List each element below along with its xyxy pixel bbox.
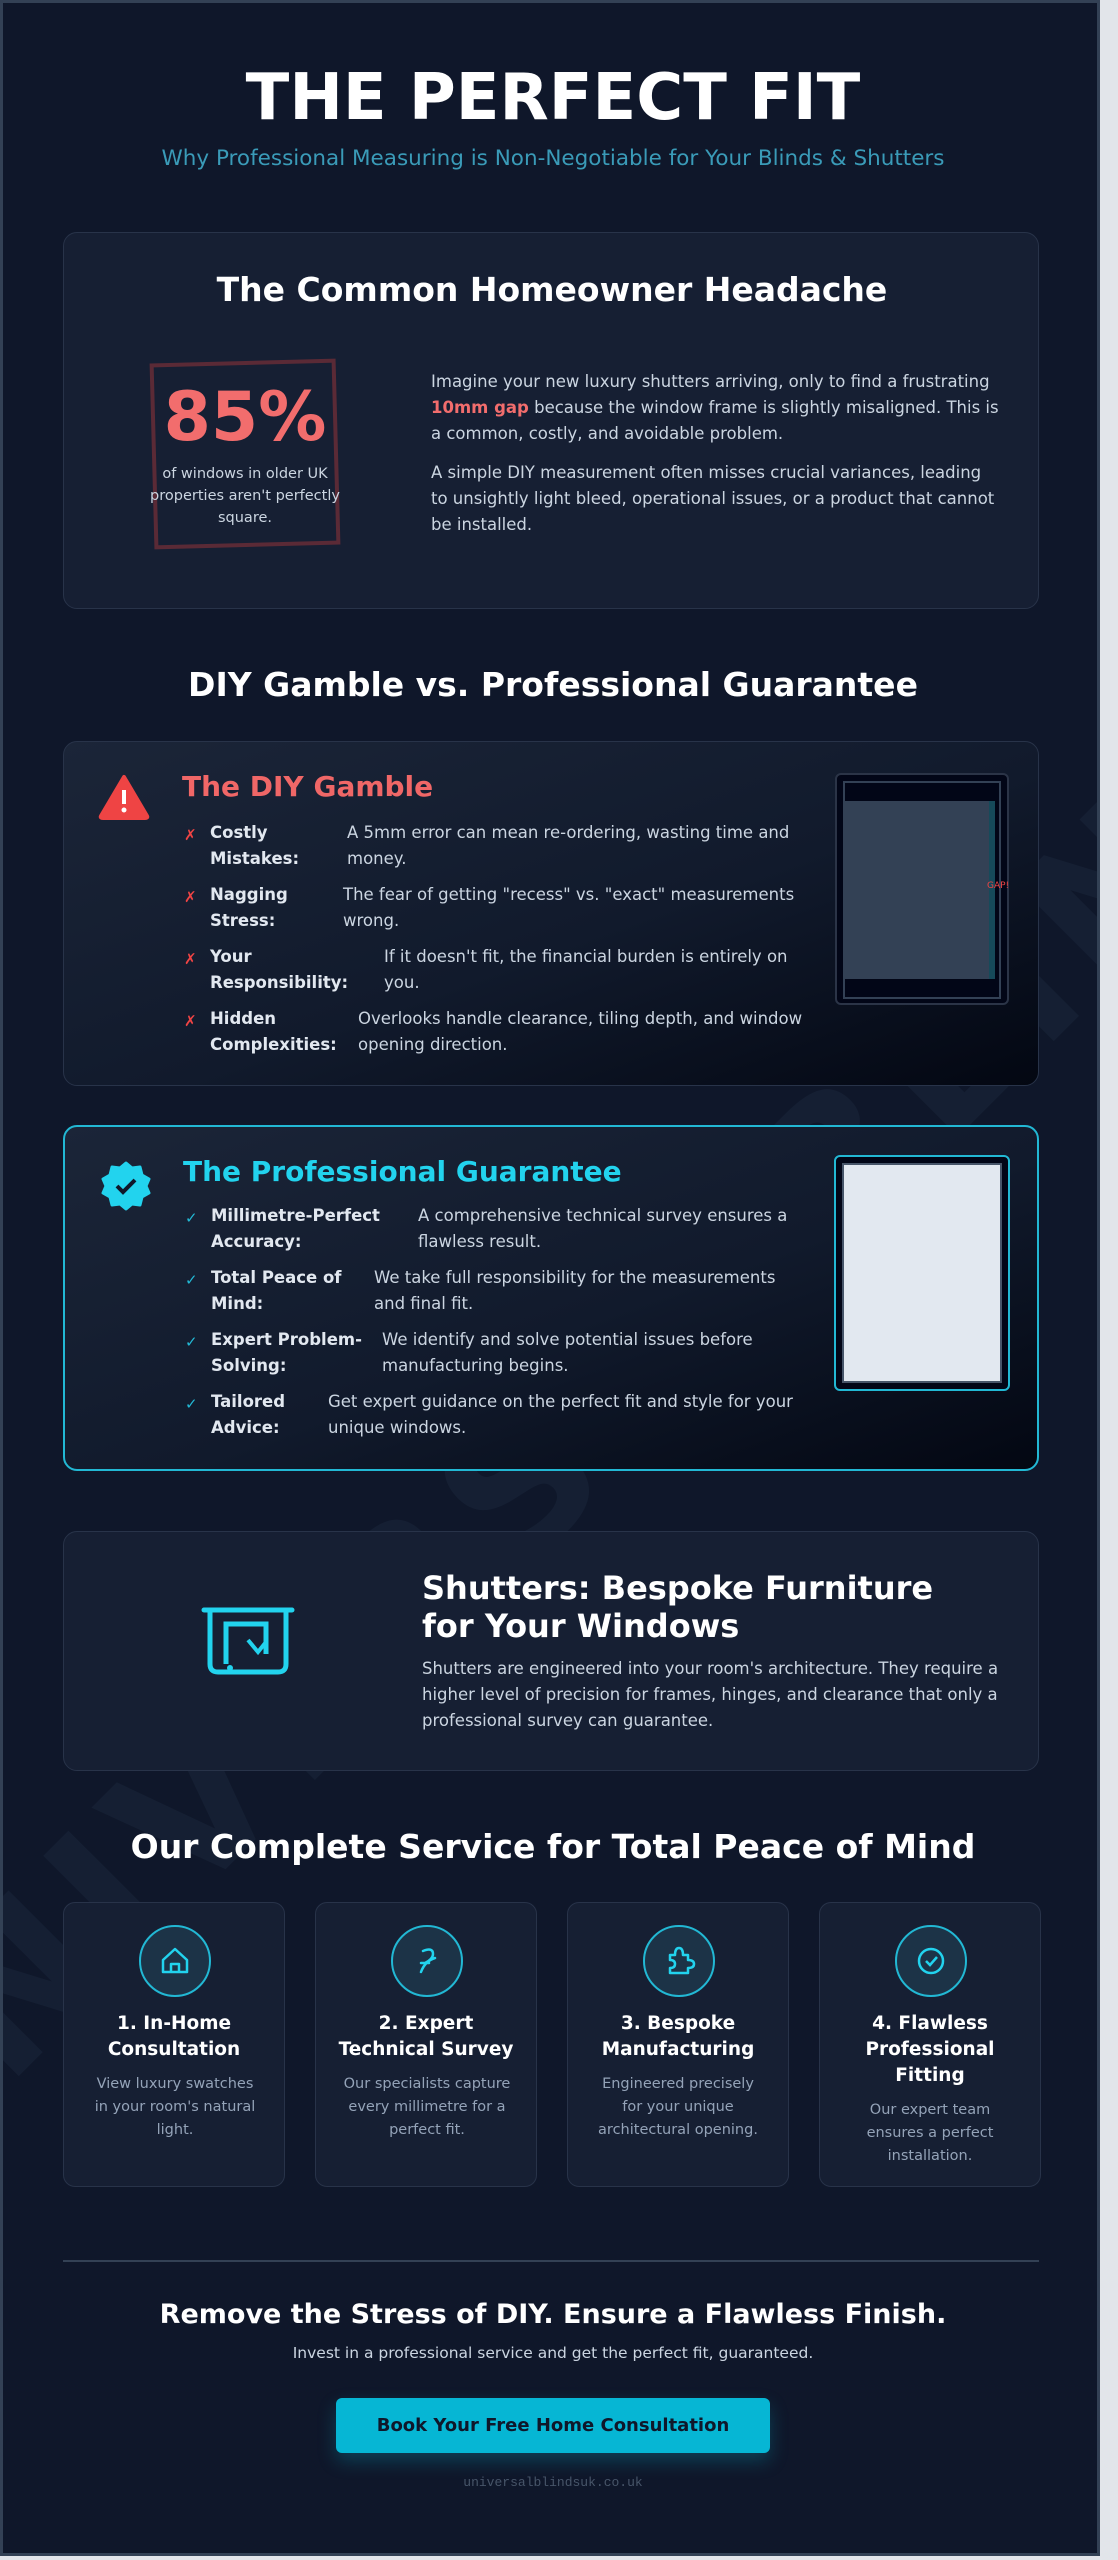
card: manufacturing xyxy=(567,1902,789,2187)
icon: check circle xyxy=(895,1925,967,1997)
panel: professional guarantee: ✓ xyxy=(185,1333,198,1351)
panel: professional guarantee: Tailored Advice: xyxy=(211,1392,285,1437)
panel: common homeowner headache: of windows in older UK properties aren't perfectly square. xyxy=(150,466,340,526)
text block xyxy=(431,372,999,534)
icon: puzzle xyxy=(643,1925,715,1997)
panel: DIY gamble: ✗ xyxy=(184,1012,197,1030)
card: consultation xyxy=(63,1902,285,2187)
list: ✗ xyxy=(184,826,197,844)
heading: The Common Homeowner Headache xyxy=(217,270,887,309)
card: fitting: Professional xyxy=(865,2039,995,2060)
panel: common homeowner headache xyxy=(63,232,1039,609)
card: fitting: Fitting xyxy=(895,2065,965,2086)
card: consultation: Consultation xyxy=(108,2039,240,2060)
footer url: universalblindsuk.co.uk xyxy=(463,2475,643,2490)
card: survey xyxy=(315,1902,537,2187)
list: Millimetre-Perfect Accuracy: xyxy=(211,1206,380,1251)
title: THE PERFECT FIT xyxy=(246,61,860,135)
panel: common homeowner headache: 85% xyxy=(164,378,326,457)
panel: DIY gamble xyxy=(63,741,1039,1086)
card: survey: 2. Expert xyxy=(379,2013,473,2034)
list: ✓ xyxy=(185,1209,198,1227)
icon: shutter xyxy=(202,1608,294,1674)
panel: DIY gamble: Overlooks handle clearance, tiling depth, and window opening direction. xyxy=(358,1009,802,1054)
list: A 5mm error can mean re-ordering, wasting time and money. xyxy=(347,823,789,868)
stat box: 85% xyxy=(150,359,340,549)
icon: warning xyxy=(98,774,150,820)
panel: DIY gamble: Nagging Stress: xyxy=(210,885,288,930)
title: The DIY Gamble xyxy=(182,770,433,803)
panel: professional guarantee: ✓ xyxy=(185,1271,198,1289)
panel: DIY gamble: Your Responsibility: xyxy=(210,947,348,992)
CTA heading: Remove the Stress of DIY. Ensure a Flawless Finish. xyxy=(160,2299,946,2330)
list: A comprehensive technical survey ensures a flawless result. xyxy=(418,1206,787,1251)
card: manufacturing: Engineered precisely for your unique architectural opening. xyxy=(598,2076,758,2138)
CTA button xyxy=(336,2398,770,2453)
panel: DIY gamble: ✗ xyxy=(184,888,197,906)
title: The Professional Guarantee xyxy=(183,1155,622,1188)
card: consultation: 1. In-Home xyxy=(117,2013,231,2034)
panel: DIY gamble: The fear of getting "recess" vs. "exact" measurements wrong. xyxy=(343,885,794,930)
panel: DIY gamble: Hidden Complexities: xyxy=(210,1009,337,1054)
card: survey: Our specialists capture every millimetre for a perfect fit. xyxy=(344,2076,510,2138)
subtitle: Why Professional Measuring is Non-Negotiable for Your Blinds & Shutters xyxy=(162,146,944,171)
list: Costly Mistakes: xyxy=(210,823,299,868)
panel: shutters bespoke xyxy=(63,1531,1039,1771)
panel: professional guarantee: We take full responsibility for the measurements and final fit. xyxy=(374,1268,775,1313)
illustration: perfect window xyxy=(834,1155,1010,1391)
illustration: gapped window xyxy=(835,773,1009,1005)
panel: professional guarantee: We identify and solve potential issues before manufacturing begins. xyxy=(382,1330,753,1375)
panel: professional guarantee: Get expert guidance on the perfect fit and style for your unique windows. xyxy=(328,1392,793,1437)
icon: verified badge xyxy=(102,1162,150,1210)
list xyxy=(185,1206,787,1251)
text block: Imagine your new luxury shutters arriving, only to find a frustrating 10mm gap because the window frame is slightly misaligned. This is a common, costly, and avoidable problem. xyxy=(431,372,999,443)
card: fitting: 4. Flawless xyxy=(872,2013,988,2034)
illustration: gapped window: GAP! xyxy=(987,881,1009,891)
panel: DIY gamble: ✗ xyxy=(184,950,197,968)
card: manufacturing: 3. Bespoke xyxy=(621,2013,735,2034)
text: Shutters are engineered into your room's architecture. They require a higher level of precision for frames, hinges, and clearance that only a professional survey can guarantee. xyxy=(422,1659,998,1730)
text block: A simple DIY measurement often misses crucial variances, leading to unsightly light bleed, operational issues, or a product that cannot be installed. xyxy=(431,463,994,534)
card: consultation: View luxury swatches in your room's natural light. xyxy=(95,2076,255,2138)
panel: professional guarantee: ✓ xyxy=(185,1395,198,1413)
panel: professional guarantee: Expert Problem-Solving: xyxy=(211,1330,362,1375)
card: fitting: Our expert team ensures a perfect installation. xyxy=(867,2102,993,2164)
CTA button: Book Your Free Home Consultation xyxy=(377,2415,729,2436)
heading: complete service: Our Complete Service for Total Peace of Mind xyxy=(131,1827,975,1866)
icon: home xyxy=(139,1925,211,1997)
panel: professional guarantee: Total Peace of Mind: xyxy=(211,1268,341,1313)
CTA subtext: Invest in a professional service and get the perfect fit, guaranteed. xyxy=(293,2344,813,2362)
card: fitting xyxy=(819,1902,1041,2187)
card: manufacturing: Manufacturing xyxy=(602,2039,754,2060)
card: survey: Technical Survey xyxy=(339,2039,513,2060)
heading: DIY vs Pro: DIY Gamble vs. Professional Guarantee xyxy=(188,665,918,704)
icon: survey xyxy=(391,1925,463,1997)
heading: Shutters: Bespoke Furniture for Your Windows xyxy=(422,1569,933,1645)
panel: professional guarantee xyxy=(63,1125,1039,1471)
panel: DIY gamble: If it doesn't fit, the financial burden is entirely on you. xyxy=(384,947,788,992)
